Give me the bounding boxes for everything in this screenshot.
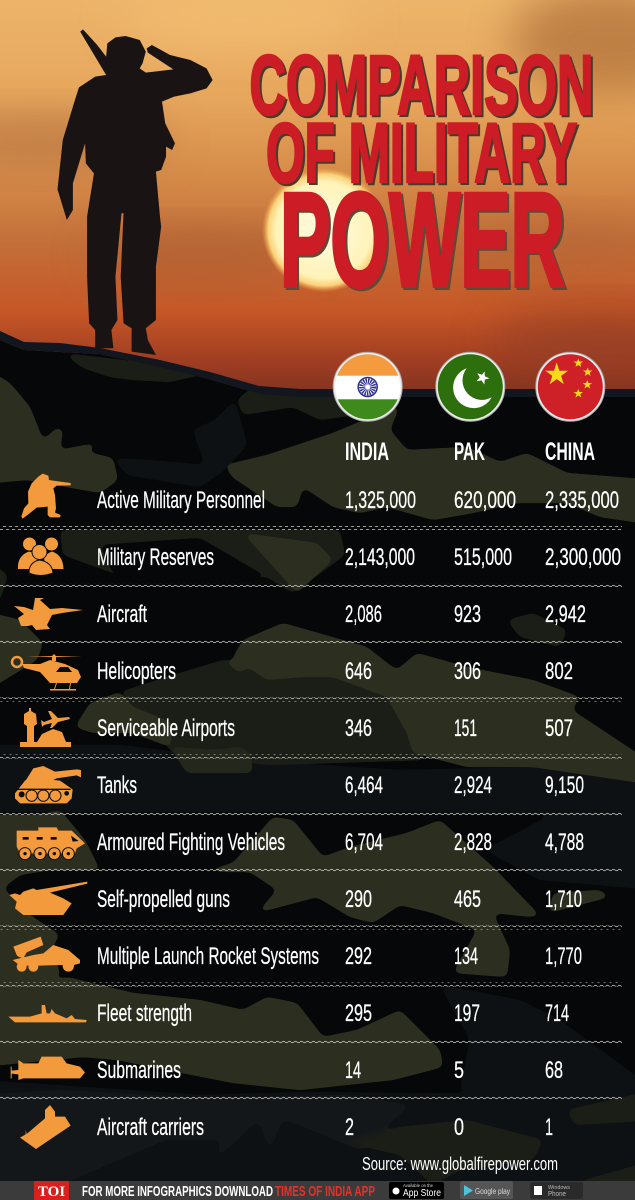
badge: Google Play (460, 1181, 513, 1199)
badge: App Store (389, 1182, 444, 1199)
row: Aircraft: 2,942 (545, 601, 586, 628)
dark horizon hill (0, 331, 635, 397)
row: Military Reserves: 2,143,000 (345, 544, 415, 571)
column headers: INDIA (345, 438, 389, 466)
row: Multiple Launch Rocket Systems: Multiple Launch Rocket Systems (97, 943, 319, 970)
row: Self-propelled guns: 1,710 (545, 886, 582, 913)
row: Tanks: Tanks (97, 772, 137, 799)
row dividers (0, 526, 622, 1100)
icon: fighter jet (14, 598, 83, 630)
row: Fleet strength: Fleet strength (97, 1000, 192, 1027)
row: Aircraft carriers: 0 (454, 1114, 464, 1141)
badge: App Store: App Store (403, 1188, 441, 1199)
badge: Windows Phone: Phone (548, 1191, 566, 1198)
row: Submarines: 5 (454, 1057, 464, 1084)
row: Tanks: 6,464 (345, 772, 383, 799)
icon: rocket launcher truck (13, 937, 80, 972)
row: Self-propelled guns: 290 (345, 886, 372, 913)
icon: airport tower and plane (20, 708, 71, 747)
row: Active Military Personnel: Active Military Personnel (97, 487, 265, 514)
title (250, 38, 596, 317)
row: Submarines: 68 (545, 1057, 563, 1084)
row: Self-propelled guns (97, 886, 582, 913)
camouflage ground background (0, 340, 635, 1200)
row: Helicopters: 646 (345, 658, 372, 685)
badge: Google Play: Google play (475, 1187, 510, 1196)
row: Submarines (97, 1057, 563, 1084)
row: Armoured Fighting Vehicles: 4,788 (545, 829, 584, 856)
row: Serviceable Airports: 346 (345, 715, 372, 742)
row: Active Military Personnel (97, 487, 619, 514)
row: Helicopters: 802 (545, 658, 573, 685)
row: Armoured Fighting Vehicles (97, 829, 584, 856)
olive patches (0, 365, 635, 1090)
flag: Pakistan (436, 352, 505, 421)
charcoal patches (0, 400, 635, 1190)
footer message: TIMES OF INDIA APP (275, 1183, 375, 1200)
row: Submarines: 14 (345, 1057, 361, 1084)
row: Aircraft: 2,086 (345, 601, 382, 628)
row: Aircraft carriers (97, 1114, 553, 1141)
icon: kneeling soldier (21, 474, 71, 519)
column headers: PAK (454, 438, 485, 466)
row: Helicopters (97, 658, 573, 685)
row: Fleet strength: 295 (345, 1000, 372, 1027)
row: Serviceable Airports: Serviceable Airports (97, 715, 235, 742)
footer bar (0, 1181, 635, 1200)
row: Aircraft carriers: 2 (345, 1114, 354, 1141)
row: Serviceable Airports: 151 (454, 715, 477, 742)
TOI logo (34, 1181, 69, 1200)
badge: Windows Phone: Windows (548, 1185, 571, 1191)
TOI logo: TOI (38, 1184, 65, 1200)
row: Helicopters: 306 (454, 658, 481, 685)
row: Self-propelled guns: Self-propelled guns (97, 886, 230, 913)
column headers: CHINA (545, 438, 595, 466)
icon: self-propelled gun (9, 882, 87, 915)
row: Armoured Fighting Vehicles: Armoured Fighting Vehicles (97, 829, 285, 856)
row: Fleet strength: 714 (545, 1000, 569, 1027)
row: Military Reserves: 515,000 (454, 544, 512, 571)
row: Tanks (97, 772, 584, 799)
row: Multiple Launch Rocket Systems: 134 (454, 943, 478, 970)
source note: Source: www.globalfirepower.com (362, 1153, 558, 1174)
row: Self-propelled guns: 465 (454, 886, 481, 913)
row: Active Military Personnel: 1,325,000 (345, 487, 416, 514)
row: Serviceable Airports: 507 (545, 715, 573, 742)
badge: App Store: Available on the (403, 1183, 433, 1188)
row: Fleet strength: 197 (454, 1000, 480, 1027)
icon: aircraft carrier (20, 1105, 71, 1149)
flag: India (332, 352, 403, 422)
row: Serviceable Airports (97, 715, 573, 742)
column headers (345, 438, 595, 466)
row: Multiple Launch Rocket Systems: 1,770 (545, 943, 582, 970)
sunset sky background (0, 0, 635, 400)
sun (262, 168, 386, 292)
row: Submarines: Submarines (97, 1057, 181, 1084)
row: Tanks: 9,150 (545, 772, 584, 799)
row: Aircraft carriers: 1 (545, 1114, 553, 1141)
row: Armoured Fighting Vehicles: 6,704 (345, 829, 383, 856)
footer message: FOR MORE INFOGRAPHICS DOWNLOAD (82, 1183, 273, 1200)
row: Fleet strength (97, 1000, 569, 1027)
icon: tank (15, 766, 81, 803)
row: Armoured Fighting Vehicles: 2,828 (454, 829, 492, 856)
row: Multiple Launch Rocket Systems: 292 (345, 943, 372, 970)
icon: warship (8, 1005, 87, 1022)
dark olive patches (0, 353, 635, 1185)
soldier silhouette saluting (58, 29, 213, 355)
row: Aircraft: Aircraft (97, 601, 147, 628)
flag: China (536, 352, 605, 421)
row: Military Reserves: Military Reserves (97, 544, 214, 571)
row: Military Reserves (97, 544, 621, 571)
icon: helicopter (12, 654, 82, 690)
row: Aircraft: 923 (454, 601, 481, 628)
row: Active Military Personnel: 620,000 (454, 487, 516, 514)
row: Tanks: 2,924 (454, 772, 492, 799)
row: Helicopters: Helicopters (97, 658, 176, 685)
badge: Windows Phone (530, 1182, 583, 1199)
row: Aircraft carriers: Aircraft carriers (97, 1114, 204, 1141)
icon: submarine (11, 1057, 85, 1080)
icon: armoured vehicle (17, 827, 85, 860)
icon: group of people (18, 538, 64, 576)
black blobs (100, 538, 267, 585)
row: Aircraft (97, 601, 586, 628)
